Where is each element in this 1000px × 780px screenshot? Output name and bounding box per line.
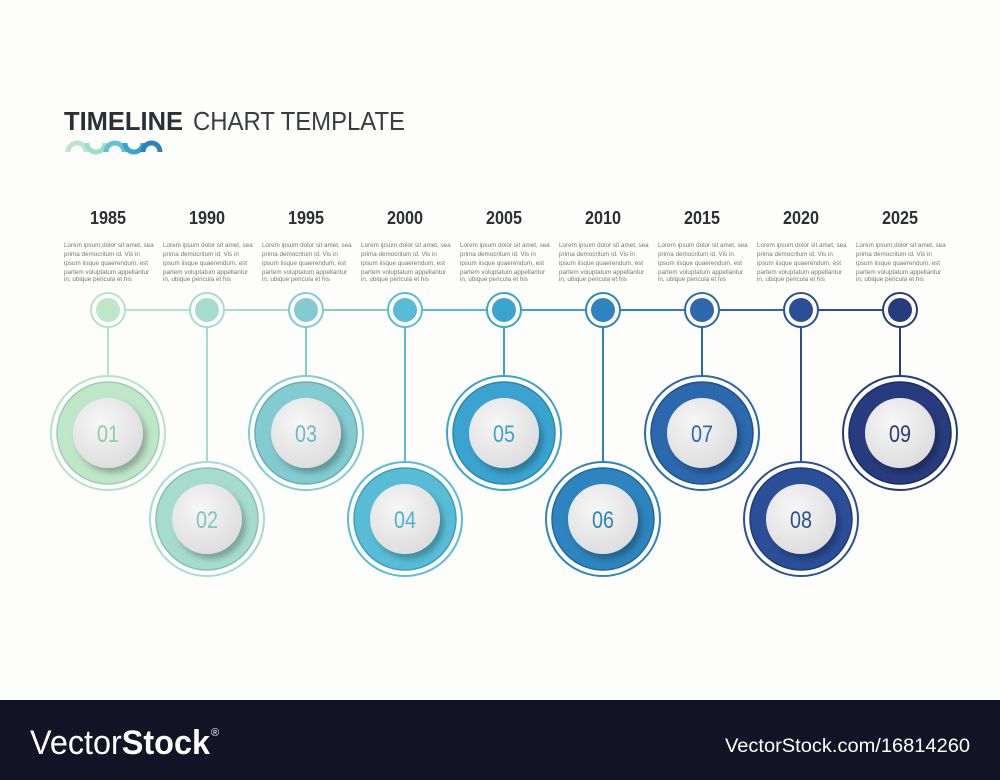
step 2015: in, ubique pericula et his bbox=[658, 276, 726, 283]
step 1990: 02 bbox=[196, 507, 218, 534]
step 1985: prima democritum id. Vis in bbox=[64, 251, 140, 258]
footer band bbox=[0, 700, 1000, 780]
step 2020: 08 bbox=[790, 507, 812, 534]
step 2000 bbox=[348, 208, 462, 576]
step 2025: 09 bbox=[889, 421, 911, 448]
step 1990: prima democritum id. Vis in bbox=[163, 251, 239, 258]
step 2000: 04 bbox=[394, 507, 416, 534]
step 2000: 2000 bbox=[387, 208, 423, 228]
step 1995: partem voluptatum appellantur bbox=[262, 269, 347, 276]
wave decoration bbox=[68, 143, 160, 152]
footer band: ® bbox=[211, 727, 219, 739]
step 1995: Lorem ipsum dolor sit amet, sea bbox=[262, 242, 352, 249]
step 2005 bbox=[447, 208, 561, 490]
step 2005: 05 bbox=[493, 421, 515, 448]
step 2000: partem voluptatum appellantur bbox=[361, 269, 446, 276]
step 1995: 1995 bbox=[288, 208, 324, 228]
step 2010: 06 bbox=[592, 507, 614, 534]
step 2010: 2010 bbox=[585, 208, 621, 228]
step 2010: in, ubique pericula et his bbox=[559, 276, 627, 283]
connecting line bbox=[108, 309, 900, 311]
step 2015: Lorem ipsum dolor sit amet, sea bbox=[658, 242, 748, 249]
step 2005: prima democritum id. Vis in bbox=[460, 251, 536, 258]
title: TIMELINE bbox=[64, 106, 183, 136]
step 2020 bbox=[744, 208, 858, 576]
step 2005: in, ubique pericula et his bbox=[460, 276, 528, 283]
step 2005: ipsum iisque quaerendum, est bbox=[460, 260, 544, 267]
step 2015: partem voluptatum appellantur bbox=[658, 269, 743, 276]
step 1985 bbox=[51, 208, 165, 490]
step 2000: Lorem ipsum dolor sit amet, sea bbox=[361, 242, 451, 249]
step 1995 bbox=[249, 208, 363, 490]
step 1985: Lorem ipsum dolor sit amet, sea bbox=[64, 242, 154, 249]
title bbox=[64, 106, 405, 136]
step 2005: partem voluptatum appellantur bbox=[460, 269, 545, 276]
title: CHART TEMPLATE bbox=[193, 106, 405, 136]
step 2025: 2025 bbox=[882, 208, 918, 228]
step 2015: prima democritum id. Vis in bbox=[658, 251, 734, 258]
step 1985: in, ubique pericula et his bbox=[64, 276, 132, 283]
step 1985: 1985 bbox=[90, 208, 126, 228]
step 1995: ipsum iisque quaerendum, est bbox=[262, 260, 346, 267]
footer band: VectorStock bbox=[30, 724, 210, 762]
step 2000: prima democritum id. Vis in bbox=[361, 251, 437, 258]
step 2015: 2015 bbox=[684, 208, 720, 228]
step 2015: 07 bbox=[691, 421, 713, 448]
step 2025: prima democritum id. Vis in bbox=[856, 251, 932, 258]
step 2025: ipsum iisque quaerendum, est bbox=[856, 260, 940, 267]
step 2010: Lorem ipsum dolor sit amet, sea bbox=[559, 242, 649, 249]
step 2010 bbox=[546, 208, 660, 576]
step 1990 bbox=[150, 208, 264, 576]
step 1995: in, ubique pericula et his bbox=[262, 276, 330, 283]
step 2010: ipsum iisque quaerendum, est bbox=[559, 260, 643, 267]
step 2025: in, ubique pericula et his bbox=[856, 276, 924, 283]
step 2020: Lorem ipsum dolor sit amet, sea bbox=[757, 242, 847, 249]
step 2010: prima democritum id. Vis in bbox=[559, 251, 635, 258]
step 2005: Lorem ipsum dolor sit amet, sea bbox=[460, 242, 550, 249]
step 1990: 1990 bbox=[189, 208, 225, 228]
step 1990: in, ubique pericula et his bbox=[163, 276, 231, 283]
step 1990: ipsum iisque quaerendum, est bbox=[163, 260, 247, 267]
step 2005: 2005 bbox=[486, 208, 522, 228]
step 1985: 01 bbox=[97, 421, 119, 448]
step 1985: partem voluptatum appellantur bbox=[64, 269, 149, 276]
step 2015: ipsum iisque quaerendum, est bbox=[658, 260, 742, 267]
step 2020: partem voluptatum appellantur bbox=[757, 269, 842, 276]
footer band: VectorStock.com/16814260 bbox=[725, 736, 970, 757]
step 2020: prima democritum id. Vis in bbox=[757, 251, 833, 258]
step 1990: Lorem ipsum dolor sit amet, sea bbox=[163, 242, 253, 249]
step 1985: ipsum iisque quaerendum, est bbox=[64, 260, 148, 267]
step 2000: ipsum iisque quaerendum, est bbox=[361, 260, 445, 267]
step 2025: partem voluptatum appellantur bbox=[856, 269, 941, 276]
step 1990: partem voluptatum appellantur bbox=[163, 269, 248, 276]
step 2020: ipsum iisque quaerendum, est bbox=[757, 260, 841, 267]
step 2025 bbox=[843, 208, 957, 490]
step 2000: in, ubique pericula et his bbox=[361, 276, 429, 283]
step 2020: in, ubique pericula et his bbox=[757, 276, 825, 283]
step 2025: Lorem ipsum dolor sit amet, sea bbox=[856, 242, 946, 249]
step 1995: 03 bbox=[295, 421, 317, 448]
step 2020: 2020 bbox=[783, 208, 819, 228]
step 1995: prima democritum id. Vis in bbox=[262, 251, 338, 258]
step 2010: partem voluptatum appellantur bbox=[559, 269, 644, 276]
step 2015 bbox=[645, 208, 759, 490]
